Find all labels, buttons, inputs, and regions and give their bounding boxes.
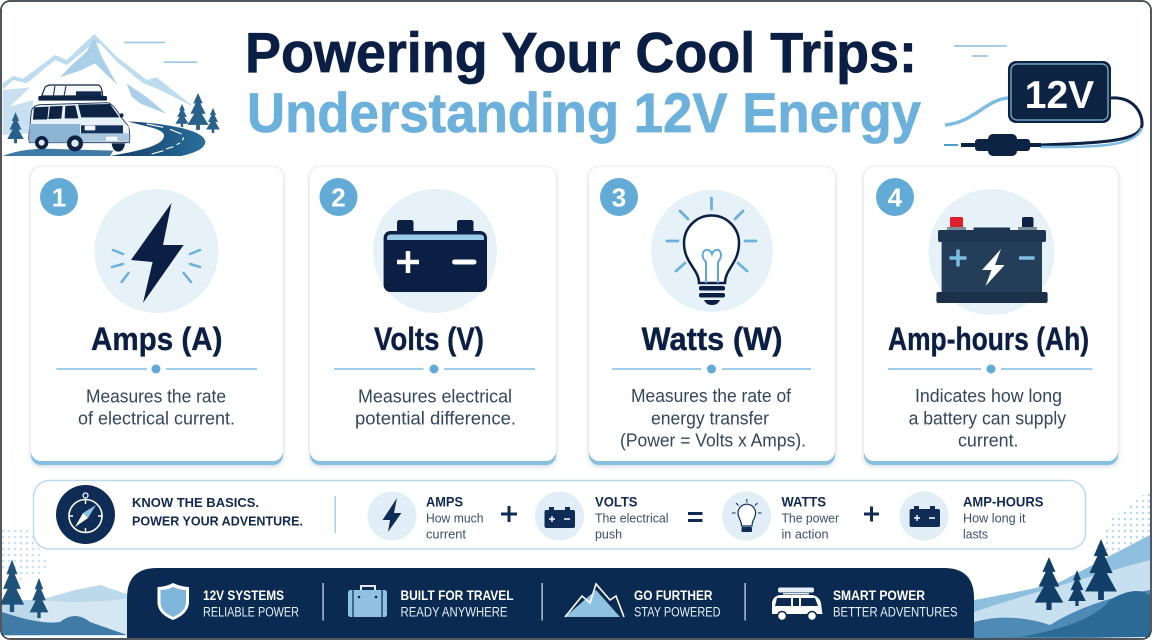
title: Understanding 12V Energy bbox=[247, 81, 921, 144]
item: amp-hours: AMP-HOURS bbox=[963, 494, 1044, 510]
number badge 1 bbox=[40, 178, 78, 216]
item: volts bbox=[535, 492, 669, 542]
icon: compass bbox=[56, 485, 115, 544]
item: amp-hours bbox=[900, 492, 1044, 542]
item: watts bbox=[722, 492, 840, 542]
number badge 2 bbox=[320, 178, 358, 216]
number badge 3 bbox=[600, 178, 638, 216]
item: watts: in action bbox=[782, 526, 828, 542]
item: watts: WATTS bbox=[782, 494, 826, 510]
description: amp-hours: Indicates how long bbox=[915, 386, 1062, 406]
text: smart power bbox=[833, 588, 958, 620]
icon: car battery bbox=[928, 189, 1054, 315]
heading: watts: Watts (W) bbox=[642, 321, 782, 357]
item: amp-hours: How long it bbox=[963, 510, 1026, 526]
text: built for travel: READY ANYWHERE bbox=[400, 604, 508, 620]
item: amps bbox=[368, 492, 484, 542]
text: 12v systems bbox=[203, 588, 299, 620]
icon: suitcase bbox=[348, 586, 387, 617]
description: volts: Measures electrical bbox=[358, 386, 512, 406]
item: volts: VOLTS bbox=[595, 494, 638, 510]
number badge 2: 2 bbox=[331, 182, 346, 212]
illustration: van on mountain road bbox=[3, 34, 220, 156]
tagline: POWER YOUR ADVENTURE. bbox=[132, 514, 303, 528]
icon: light bulb bbox=[651, 190, 773, 312]
text: 12v systems: RELIABLE POWER bbox=[203, 604, 299, 620]
illustration: 12V power adapter bbox=[944, 46, 1142, 156]
text: smart power: SMART POWER bbox=[833, 588, 925, 603]
item: volts: The electrical bbox=[595, 510, 669, 526]
halftone dots right bbox=[1095, 490, 1150, 560]
item: amp-hours: lasts bbox=[963, 526, 988, 542]
description: amp-hours: current. bbox=[958, 430, 1018, 450]
description: amp-hours: a battery can supply bbox=[909, 408, 1066, 428]
description: watts: (Power = Volts x Amps). bbox=[620, 430, 806, 450]
description: watts: Measures the rate of bbox=[631, 386, 792, 406]
number badge 4 bbox=[876, 178, 914, 216]
text: 12v systems: 12V SYSTEMS bbox=[203, 588, 284, 603]
plus sign bbox=[501, 506, 517, 522]
halftone dots left bbox=[2, 530, 50, 580]
item: amps: AMPS bbox=[426, 494, 463, 510]
heading: amps: Amps (A) bbox=[91, 321, 222, 357]
description: volts bbox=[355, 386, 516, 428]
text: built for travel: BUILT FOR TRAVEL bbox=[400, 588, 514, 603]
heading: amp-hours: Amp-hours (Ah) bbox=[888, 321, 1089, 357]
description: amps: Measures the rate bbox=[86, 386, 226, 406]
icon: battery bbox=[373, 189, 497, 313]
text: go further bbox=[634, 588, 721, 620]
description: amp-hours bbox=[909, 386, 1066, 450]
icon: van bbox=[772, 588, 822, 620]
text: go further: STAY POWERED bbox=[634, 604, 721, 620]
icon: lightning bolt bbox=[94, 189, 218, 313]
icon: shield bbox=[158, 583, 189, 620]
description: watts bbox=[620, 386, 806, 450]
footer band bbox=[127, 568, 974, 638]
equals sign bbox=[688, 514, 702, 520]
panel: volts bbox=[310, 167, 556, 465]
heading: volts: Volts (V) bbox=[374, 321, 484, 357]
summary strip bbox=[34, 480, 1086, 549]
panel: watts bbox=[589, 167, 835, 465]
panel: amp-hours bbox=[864, 167, 1118, 465]
tagline bbox=[132, 495, 303, 528]
panel: amps bbox=[31, 167, 283, 465]
title: Powering Your Cool Trips: bbox=[245, 21, 917, 85]
title bbox=[245, 21, 921, 144]
landscape: right bbox=[974, 535, 1150, 640]
number badge 4: 4 bbox=[888, 182, 903, 212]
item: volts: push bbox=[595, 526, 622, 542]
tagline: KNOW THE BASICS. bbox=[132, 495, 259, 510]
icon: mountains bbox=[565, 584, 624, 617]
number badge 1: 1 bbox=[52, 182, 66, 212]
description: watts: energy transfer bbox=[651, 408, 769, 428]
number badge 3: 3 bbox=[612, 182, 626, 212]
text: go further: GO FURTHER bbox=[634, 588, 713, 603]
landscape: left bbox=[0, 560, 130, 636]
illustration: 12V power adapter: 12V bbox=[1025, 74, 1094, 117]
plus sign bbox=[864, 506, 879, 522]
text: smart power: BETTER ADVENTURES bbox=[833, 604, 958, 620]
description: amps: of electrical current. bbox=[78, 408, 235, 428]
text: built for travel bbox=[400, 588, 514, 620]
item: amps: How much bbox=[426, 510, 484, 526]
item: watts: The power bbox=[782, 510, 840, 526]
item: amps: current bbox=[426, 526, 466, 542]
description: amps bbox=[78, 386, 235, 428]
description: volts: potential difference. bbox=[355, 408, 516, 428]
